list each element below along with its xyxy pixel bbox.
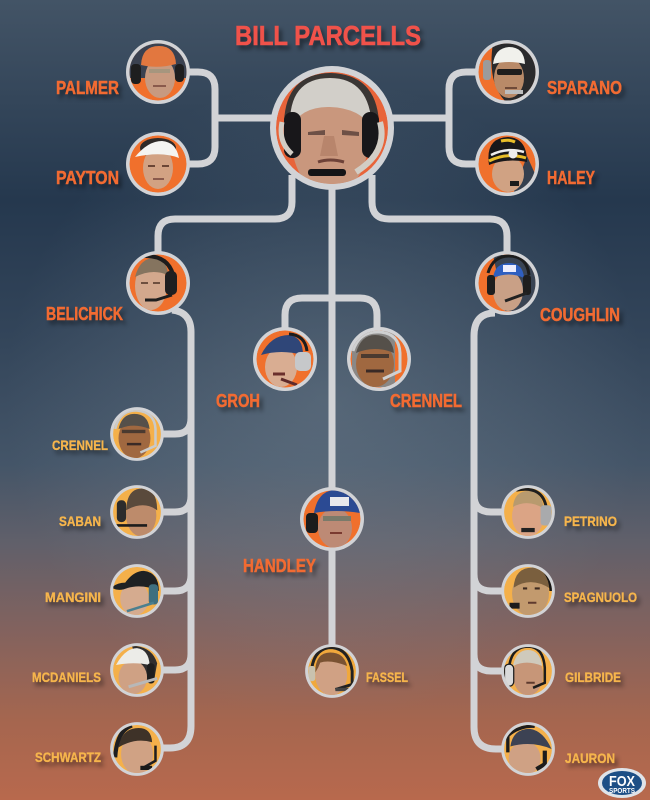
- labels: head coaches: BELICHICK: [46, 304, 123, 324]
- portrait: Palmer: [126, 40, 190, 104]
- portrait: Gilbride: [501, 644, 555, 698]
- labels: assistants: SCHWARTZ: [35, 749, 101, 765]
- labels: assistants: MCDANIELS: [32, 669, 101, 685]
- labels: assistants: [32, 437, 637, 766]
- portrait: Belichick: [126, 251, 190, 315]
- portrait: Fassel: [305, 644, 359, 698]
- portrait: McDaniels: [110, 643, 164, 697]
- title: BILL PARCELLS: [235, 20, 421, 51]
- labels: assistants: SABAN: [59, 513, 101, 529]
- portrait: Haley: [475, 132, 539, 196]
- logo: Fox Sports: SPORTS: [609, 788, 635, 795]
- labels: assistants: JAURON: [565, 750, 615, 766]
- logo: Fox Sports: [598, 768, 646, 798]
- labels: head coaches: PAYTON: [56, 168, 119, 188]
- portrait: Parcells: [270, 66, 394, 194]
- labels: assistants: FASSEL: [366, 669, 408, 685]
- labels: assistants: MANGINI: [45, 589, 101, 605]
- labels: head coaches: GROH: [216, 391, 260, 411]
- labels: head coaches: HALEY: [547, 168, 595, 188]
- portrait: Handley: [300, 487, 364, 551]
- labels: head coaches: HANDLEY: [243, 556, 316, 576]
- portrait: Crennel (left): [110, 407, 164, 461]
- connector lines: [158, 72, 507, 749]
- portrait: Spagnuolo: [501, 564, 555, 618]
- labels: head coaches: [46, 78, 622, 576]
- logo: Fox Sports: FOX: [609, 773, 635, 790]
- portrait: Payton: [126, 132, 190, 196]
- portrait: Petrino: [501, 485, 555, 539]
- portrait: Jauron: [501, 722, 555, 776]
- portrait: Sparano: [475, 40, 539, 104]
- labels: assistants: GILBRIDE: [565, 669, 621, 685]
- portrait: Groh: [253, 327, 317, 391]
- portrait: Saban: [110, 485, 164, 539]
- labels: head coaches: COUGHLIN: [540, 305, 620, 325]
- portrait: Mangini: [110, 564, 164, 618]
- portrait: Coughlin: [475, 251, 539, 315]
- portrait: Crennel (centre): [347, 327, 411, 391]
- labels: assistants: CRENNEL: [52, 437, 108, 453]
- labels: head coaches: SPARANO: [547, 78, 622, 98]
- labels: assistants: PETRINO: [564, 513, 617, 529]
- portrait: Schwartz: [110, 722, 164, 776]
- labels: head coaches: PALMER: [56, 78, 119, 98]
- labels: head coaches: CRENNEL: [390, 391, 462, 411]
